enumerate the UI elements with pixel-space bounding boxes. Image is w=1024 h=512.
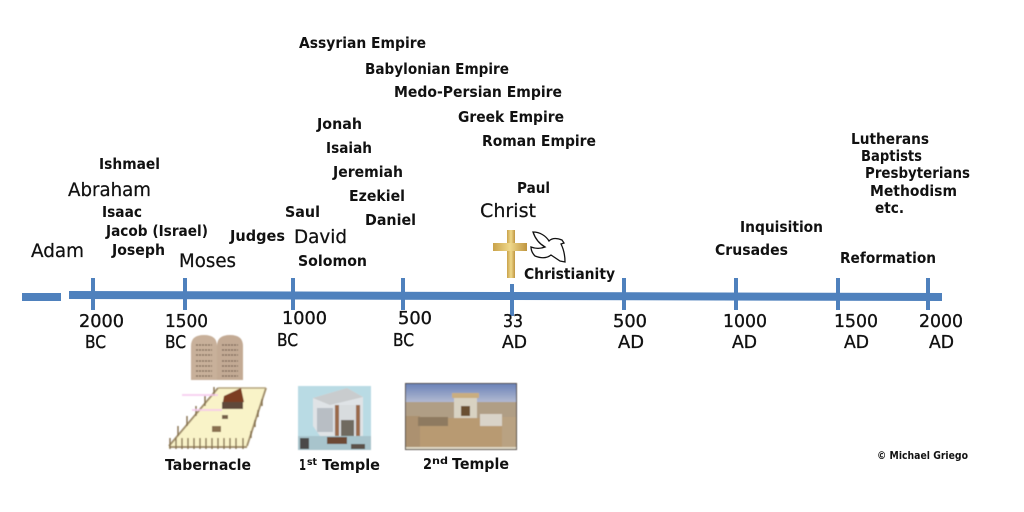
axis date labels: 1500 — [165, 312, 208, 332]
axis date labels: AD — [618, 333, 644, 353]
judges and kings — [229, 203, 367, 270]
denominations: Methodism — [870, 182, 957, 200]
icon: gold cross — [493, 230, 527, 278]
axis date labels: 500 — [613, 312, 647, 332]
axis date labels: AD — [929, 333, 954, 353]
prophets: Isaiah — [326, 139, 372, 157]
judges and kings: David — [294, 226, 347, 248]
image: tabernacle — [168, 387, 266, 449]
prophets: Ezekiel — [349, 187, 405, 205]
denominations: Baptists — [861, 147, 922, 165]
christ and paul — [480, 179, 550, 222]
prophets: Jonah — [316, 115, 362, 133]
axis date labels: 500 — [398, 309, 432, 329]
prophets: Daniel — [365, 211, 416, 229]
axis date labels: 1000 — [282, 309, 327, 329]
empires: Medo-Persian Empire — [394, 83, 562, 101]
icon: dove — [531, 232, 565, 262]
patriarchs: Isaac — [102, 203, 142, 221]
patriarchs: Abraham — [68, 179, 151, 201]
second temple label — [423, 455, 509, 473]
axis date labels: BC — [277, 331, 298, 351]
axis date labels: AD — [502, 333, 527, 353]
axis date labels: 1000 — [723, 312, 767, 332]
first temple label: Temple — [322, 456, 380, 474]
axis date labels: 2000 — [79, 312, 124, 332]
empires: Roman Empire — [482, 132, 596, 150]
axis date labels: BC — [393, 331, 414, 351]
empires — [299, 34, 596, 150]
second temple label: Temple — [452, 455, 509, 473]
prophets: Jeremiah — [332, 163, 403, 181]
first temple label: 1 — [299, 456, 306, 474]
patriarchs: Ishmael — [99, 155, 160, 173]
church history events: Inquisition — [740, 218, 823, 236]
empires: Babylonian Empire — [365, 60, 509, 78]
first temple label: st — [307, 457, 317, 468]
image: stone tablets — [191, 335, 243, 380]
patriarchs: Joseph — [111, 241, 165, 259]
timeline axis — [22, 278, 942, 316]
axis date labels: 2000 — [919, 312, 963, 332]
axis date labels: AD — [732, 333, 757, 353]
axis date labels — [79, 309, 963, 353]
patriarchs: Moses — [179, 250, 236, 272]
church history events: Crusades — [715, 241, 788, 259]
tabernacle label: Tabernacle — [165, 456, 251, 474]
image: first temple — [298, 386, 371, 450]
christ and paul: Paul — [517, 179, 550, 197]
axis date labels: BC — [85, 333, 106, 353]
judges and kings: Judges — [229, 227, 285, 245]
empires: Greek Empire — [458, 108, 564, 126]
axis date labels: AD — [844, 333, 869, 353]
patriarchs: Jacob (Israel) — [105, 222, 208, 240]
denominations — [851, 130, 970, 217]
second temple label: 2 — [423, 455, 432, 473]
church history events — [715, 218, 936, 267]
first temple label — [299, 456, 380, 474]
second temple label: nd — [432, 456, 448, 467]
copyright: © Michael Griego — [877, 449, 968, 462]
patriarchs: Adam — [31, 240, 84, 262]
patriarchs — [31, 155, 236, 272]
prophets — [316, 115, 416, 229]
judges and kings: Solomon — [298, 252, 367, 270]
christ and paul: Christ — [480, 200, 536, 222]
denominations: Lutherans — [851, 130, 929, 148]
axis date labels: 1500 — [834, 312, 878, 332]
denominations: Presbyterians — [865, 164, 970, 182]
image: second temple — [405, 383, 517, 450]
axis date labels: BC — [165, 333, 186, 353]
church history events: Reformation — [840, 249, 936, 267]
empires: Assyrian Empire — [299, 34, 426, 52]
axis date labels: 33 — [503, 312, 523, 332]
judges and kings: Saul — [285, 203, 320, 221]
denominations: etc. — [875, 199, 904, 217]
christianity label: Christianity — [524, 265, 615, 283]
